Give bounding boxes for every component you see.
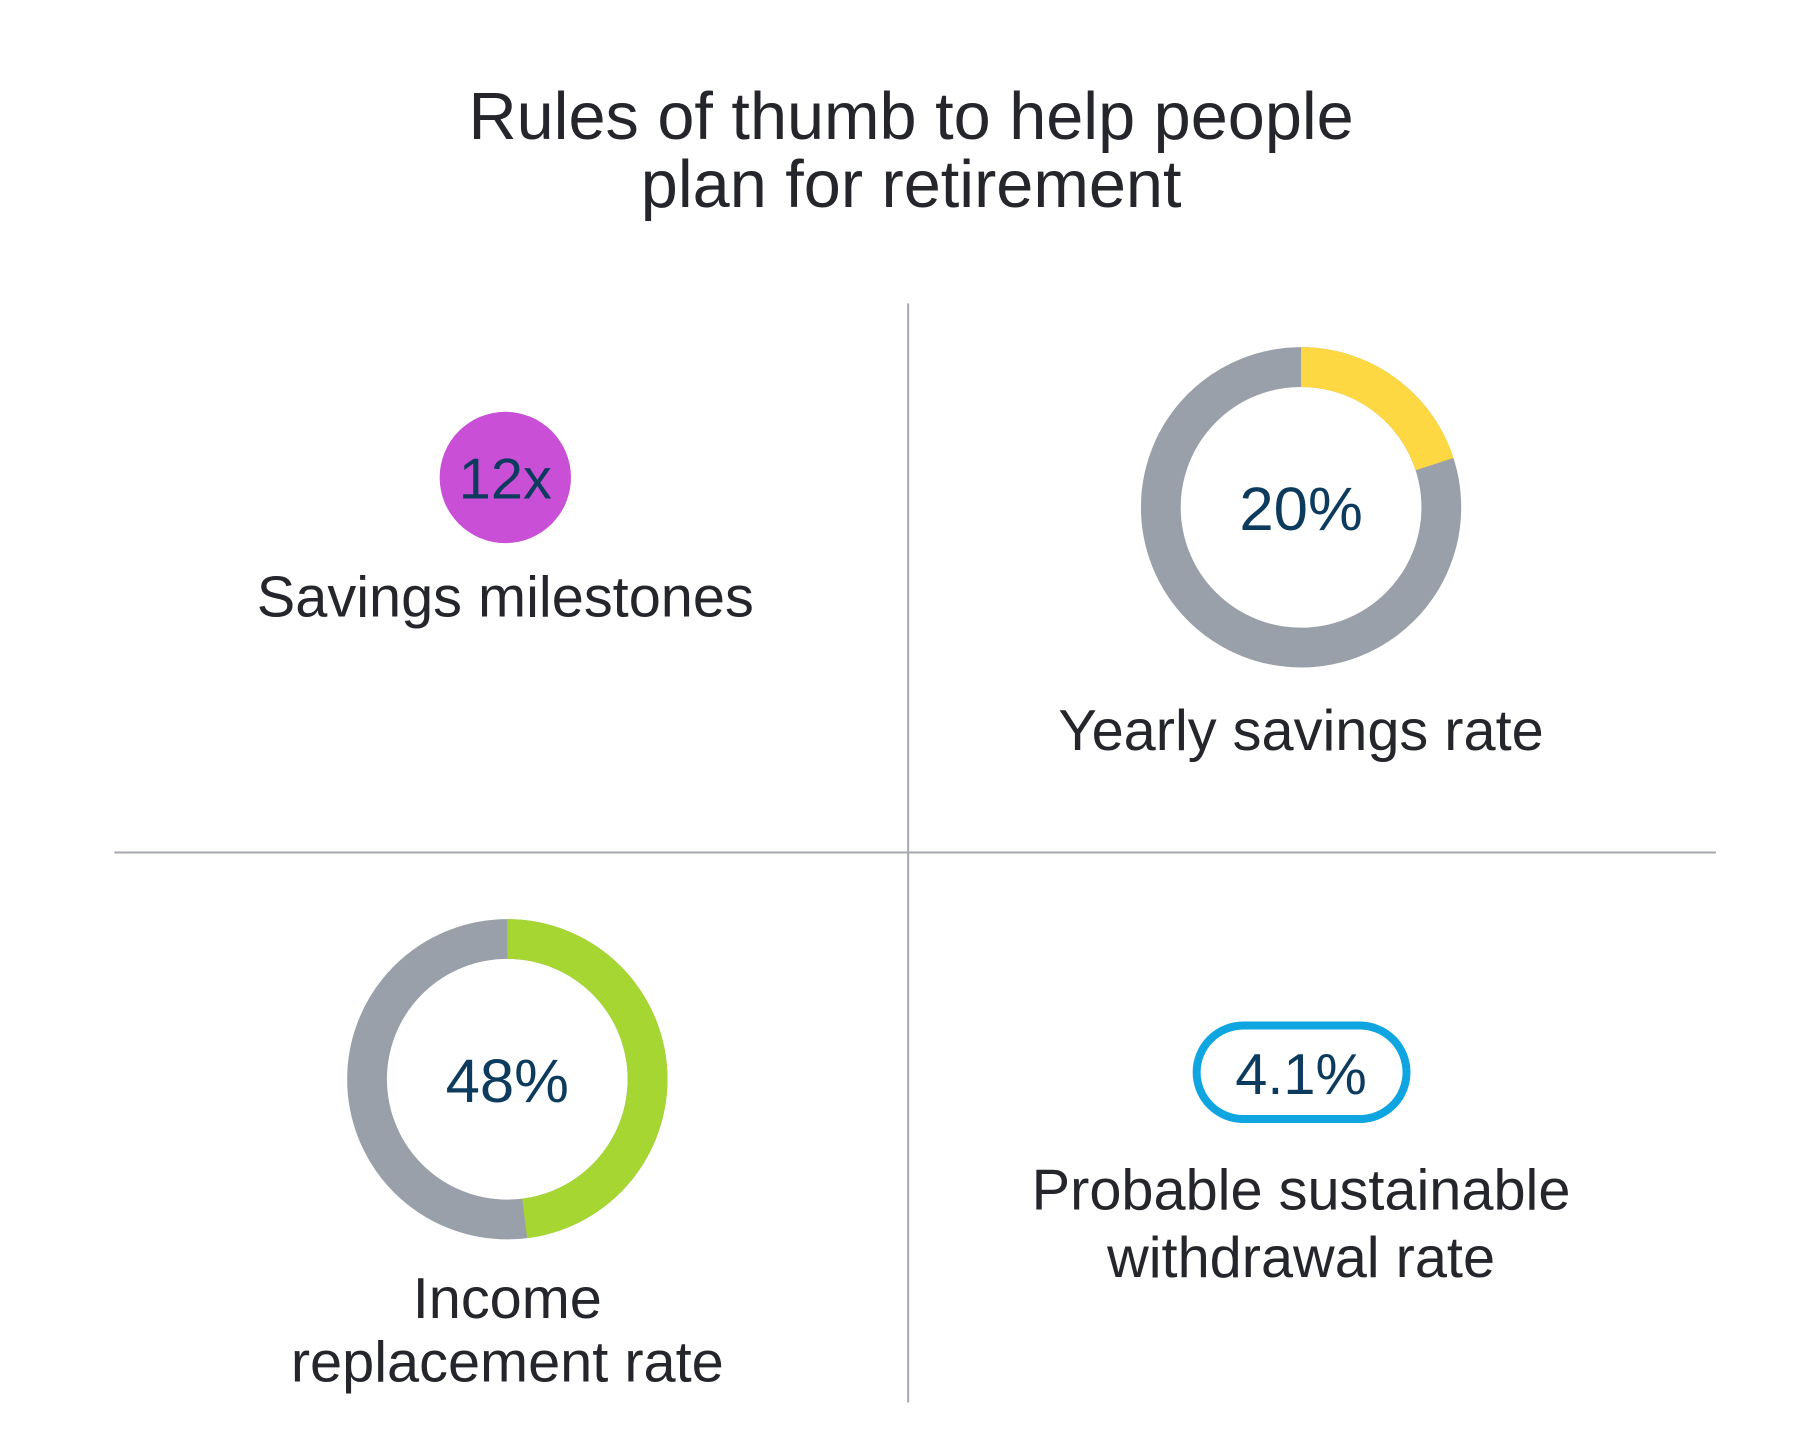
title: plan for retirement	[641, 148, 1182, 222]
title	[469, 80, 1354, 222]
donut chart: 48%	[367, 939, 648, 1220]
label: income replacement rate: replacement rate	[291, 1331, 724, 1395]
label: probable sustainable withdrawal rate: withdrawal rate	[1106, 1226, 1495, 1290]
pill: 4.1%	[1197, 1026, 1407, 1119]
panel: income replacement rate	[291, 939, 724, 1395]
panel: savings milestones	[257, 412, 754, 630]
label: income replacement rate: Income	[413, 1267, 602, 1331]
icon: purple circle 12x: 12x	[459, 447, 552, 511]
donut chart: 20%: 20%	[1239, 475, 1363, 544]
label: savings milestones: Savings milestones	[257, 566, 754, 630]
title: Rules of thumb to help people	[469, 80, 1354, 154]
pill: 4.1%: 4.1%	[1235, 1043, 1367, 1107]
icon: purple circle 12x	[440, 412, 571, 543]
label: income replacement rate	[291, 1267, 724, 1395]
panel: yearly savings rate	[1058, 367, 1544, 763]
label: probable sustainable withdrawal rate: Probable sustainable	[1032, 1159, 1570, 1223]
donut chart: 48%: 48%	[446, 1047, 569, 1116]
label: yearly savings rate: Yearly savings rate	[1058, 699, 1544, 763]
donut chart: 20%	[1161, 367, 1441, 648]
panel: withdrawal rate	[1032, 1026, 1570, 1290]
label: probable sustainable withdrawal rate	[1032, 1159, 1570, 1290]
